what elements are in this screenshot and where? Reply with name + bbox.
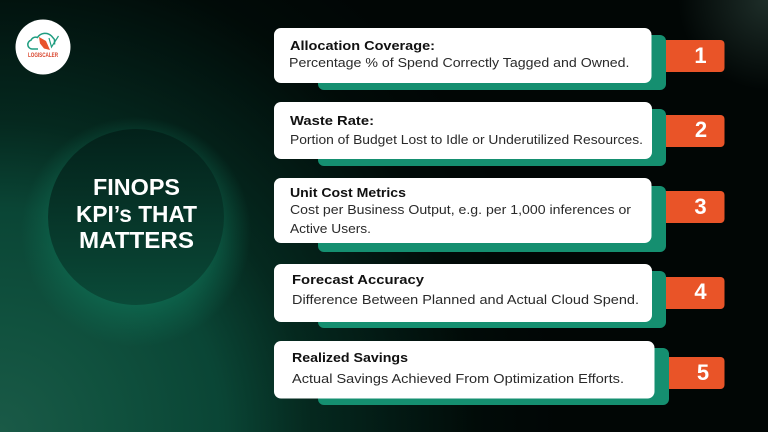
icon: check mark [49, 36, 58, 47]
green backing 1 [318, 35, 666, 90]
title: MATTERS [79, 227, 194, 253]
card 4: Difference Between Planned and Actual Cloud Spend. [292, 292, 639, 307]
number tab 4 [655, 277, 724, 309]
card 3 [274, 178, 652, 243]
number tab 5: 5 [697, 360, 709, 385]
card 2: Portion of Budget Lost to Idle or Underutilized Resources. [290, 132, 643, 147]
item 1 [274, 28, 724, 90]
title circle [48, 129, 224, 305]
card 3: Cost per Business Output, e.g. per 1,000 inferences or [290, 202, 632, 217]
number tab 2: 2 [695, 117, 707, 142]
item 4 [274, 264, 724, 328]
green backing 3 [318, 186, 666, 252]
card 3: Unit Cost Metrics [290, 185, 406, 200]
card 4 [274, 264, 652, 322]
card 2 [274, 102, 652, 159]
green backing 2 [318, 109, 666, 166]
card 2: Waste Rate: [290, 113, 374, 128]
card 1: Percentage % of Spend Correctly Tagged and Owned. [289, 55, 630, 70]
card 5 [274, 341, 654, 398]
icon: orange arrow [39, 37, 50, 50]
green backing 5 [318, 348, 669, 405]
card 5: Realized Savings [292, 350, 408, 365]
number tab 1 [655, 40, 724, 72]
item 3 [274, 178, 724, 252]
item 2 [274, 102, 724, 166]
title: KPI’s THAT [76, 201, 197, 227]
logo wordmark: LOGISCALER [28, 53, 59, 59]
title [76, 174, 197, 253]
card 1 [274, 28, 652, 83]
title: FINOPS [93, 174, 180, 200]
icon: cloud [28, 33, 54, 49]
card 4: Forecast Accuracy [292, 272, 425, 287]
item 5 [274, 341, 724, 405]
number tab 2 [655, 115, 724, 147]
green backing 4 [318, 271, 666, 328]
number tab 4: 4 [694, 279, 707, 304]
number tab 3 [655, 191, 724, 223]
card 5: Actual Savings Achieved From Optimization Efforts. [292, 371, 624, 386]
card 1: Allocation Coverage: [290, 38, 435, 53]
number tab 5 [660, 357, 724, 389]
number tab 1: 1 [694, 43, 707, 68]
card 3: Active Users. [290, 221, 371, 236]
number tab 3: 3 [694, 194, 707, 219]
logo badge [16, 20, 70, 74]
